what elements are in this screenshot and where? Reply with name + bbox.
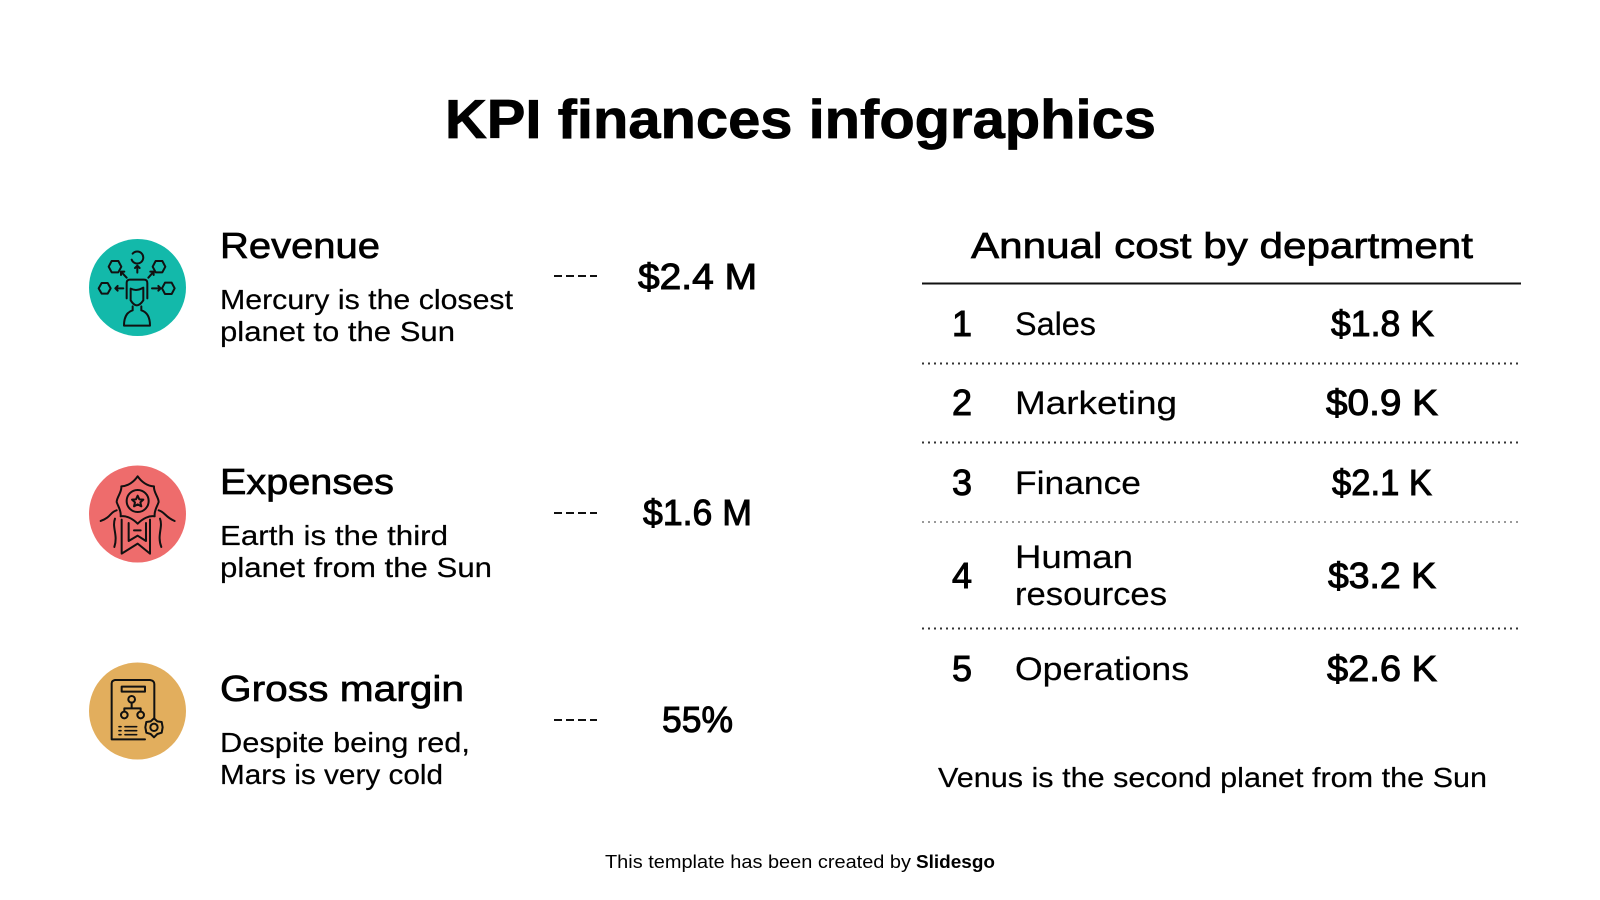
row 2: Marketing: [952, 382, 1438, 423]
table note: Venus is the second planet from the Sun: [938, 762, 1487, 793]
description: Gross margin: [220, 727, 470, 790]
description: Revenue: [220, 284, 513, 347]
footer credit: Slidesgo: [916, 852, 995, 872]
panel: expenses KPI: [89, 461, 752, 583]
footer credit: This template has been created by: [605, 852, 911, 872]
value: revenue: $2.4 M: [638, 256, 757, 297]
title: KPI finances infographics: [445, 88, 1156, 150]
row 4: Human resources: 4: [952, 555, 972, 596]
row 2: Marketing: Marketing: [1015, 385, 1177, 421]
row 2: Marketing: 2: [952, 382, 972, 423]
table heading: Annual cost by department: [971, 225, 1473, 266]
row 4: Human resources: [952, 539, 1436, 612]
row 5: Operations: Operations: [1015, 651, 1189, 687]
row 4: Human resources: $3.2 K: [1328, 555, 1436, 596]
row 4: Human resources: Human: [1015, 539, 1133, 575]
row 3: Finance: [952, 462, 1432, 503]
description: Revenue: Mercury is the closest: [220, 284, 513, 315]
panel: gross margin KPI: [89, 662, 733, 790]
description: Gross margin: Despite being red,: [220, 727, 470, 758]
connector dashes: [554, 719, 597, 721]
description: Revenue: planet to the Sun: [220, 316, 455, 347]
icon: award badge: [89, 466, 186, 562]
row 5: Operations: $2.6 K: [1327, 648, 1437, 689]
row 1: Sales: Sales: [1015, 306, 1096, 342]
panel: revenue KPI: [89, 225, 757, 347]
row 4: Human resources: resources: [1015, 576, 1167, 612]
connector dashes: [554, 275, 597, 277]
icon: document with gear: [89, 662, 186, 760]
row 5: Operations: 5: [952, 648, 972, 689]
row 5: Operations: [952, 648, 1437, 689]
row 3: Finance: Finance: [1015, 465, 1141, 501]
row 3: Finance: $2.1 K: [1332, 462, 1432, 503]
heading: Gross margin: Gross margin: [220, 668, 464, 709]
value: gross margin: 55%: [662, 699, 733, 740]
description: Expenses: planet from the Sun: [220, 552, 492, 583]
description: Expenses: Earth is the third: [220, 520, 448, 551]
row 1: Sales: [952, 303, 1434, 344]
row 1: Sales: $1.8 K: [1331, 303, 1434, 344]
heading: Revenue: Revenue: [220, 225, 380, 266]
row 2: Marketing: $0.9 K: [1326, 382, 1438, 423]
connector dashes: [554, 512, 597, 514]
heading: Expenses: Expenses: [220, 461, 394, 502]
row 1: Sales: 1: [952, 303, 972, 344]
value: expenses: $1.6 M: [643, 492, 752, 533]
icon: person with ideas: [89, 239, 186, 336]
panel: annual cost table: [922, 225, 1521, 793]
description: Gross margin: Mars is very cold: [220, 759, 443, 790]
row 3: Finance: 3: [952, 462, 972, 503]
description: Expenses: [220, 520, 492, 583]
